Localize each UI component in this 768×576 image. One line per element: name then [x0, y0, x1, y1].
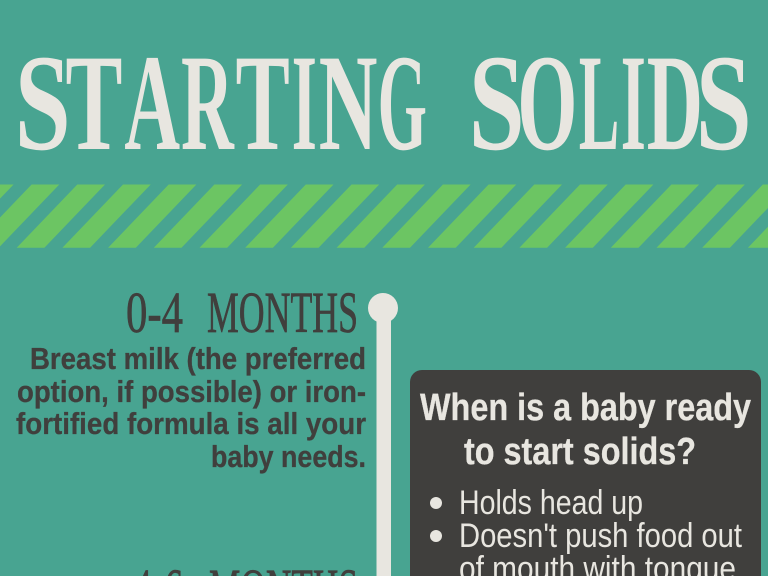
title: O [517, 27, 577, 180]
title: G [378, 27, 427, 180]
heading: 0-4 months: MONTHS [207, 280, 358, 345]
timeline [368, 293, 398, 576]
title: S [469, 27, 525, 180]
body text: 0-4 months: option, if possible) or iron- [17, 374, 366, 409]
panel heading [420, 387, 751, 473]
title: T [65, 26, 122, 179]
title: T [236, 26, 290, 179]
title: I [292, 27, 317, 180]
body text: 0-4 months: Breast milk (the preferred [30, 341, 366, 376]
panel: readiness signs [410, 370, 761, 576]
body text: 0-4 months: fortified formula is all your [16, 406, 366, 441]
heading: 0-4 months [126, 280, 358, 345]
title: N [319, 26, 377, 179]
section: 0-4 months [16, 280, 366, 474]
checklist [430, 484, 742, 576]
striped banner [0, 184, 768, 248]
heading: 0-4 months: 0-4 [126, 280, 183, 345]
title: S [696, 27, 752, 180]
title: A [124, 27, 180, 180]
title [15, 26, 752, 180]
heading: 4-6 months [133, 557, 358, 576]
title: D [647, 27, 703, 180]
title: S [15, 27, 71, 180]
panel heading: to start solids? [464, 431, 696, 473]
title: R [181, 27, 235, 179]
body text: 0-4 months: baby needs. [211, 439, 366, 474]
title: I [621, 27, 646, 180]
title: L [579, 27, 619, 180]
checklist: Holds head up [459, 484, 643, 522]
body text: 0-4 months [16, 341, 366, 474]
